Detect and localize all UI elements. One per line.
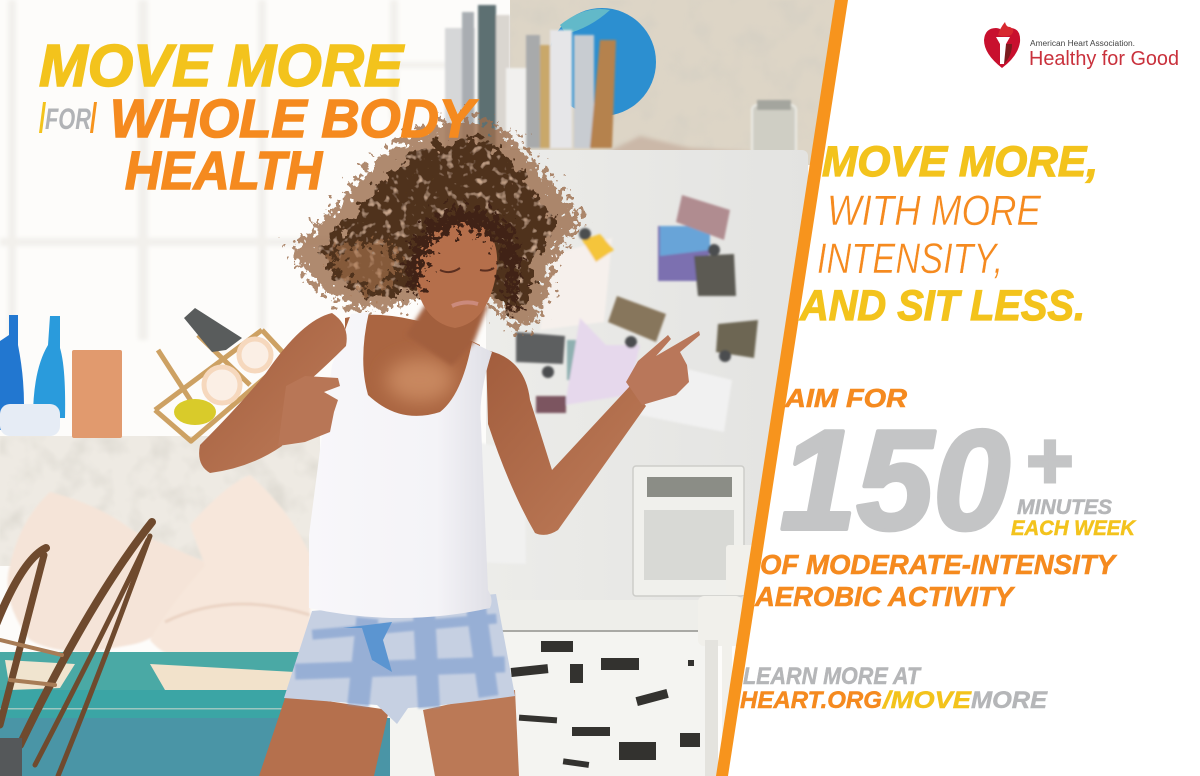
woman bbox=[199, 118, 700, 776]
wine rack bbox=[155, 330, 288, 442]
right hand bbox=[626, 331, 700, 405]
title: move more for whole body health bbox=[39, 33, 479, 201]
glass jar bbox=[752, 100, 796, 155]
logo: American Heart Association Healthy for Good: Healthy for Good bbox=[1029, 48, 1179, 70]
left arm bbox=[199, 313, 347, 473]
stat: aim for 150+ minutes each week: EACH WEEK bbox=[1011, 517, 1137, 540]
logo: American Heart Association Healthy for Good bbox=[984, 22, 1179, 70]
activity description bbox=[754, 549, 1117, 612]
orange diagonal stripe bbox=[716, 0, 848, 776]
windowsill wall bbox=[0, 436, 320, 566]
white right panel bbox=[728, 0, 1200, 776]
teal bench bbox=[0, 652, 390, 776]
outer wisps bbox=[292, 118, 582, 328]
call to action: learn more: HEART.ORG bbox=[740, 687, 882, 714]
message: move more, with more intensity, and sit less: AND SIT LESS. bbox=[799, 282, 1085, 330]
books bbox=[445, 5, 616, 148]
fridge upper door bbox=[486, 150, 808, 620]
call to action: learn more: LEARN MORE AT bbox=[743, 663, 922, 690]
fridge lower door bbox=[388, 620, 705, 776]
wooden chairs bbox=[0, 522, 152, 776]
white side table bbox=[698, 545, 756, 776]
shorts bbox=[284, 594, 515, 724]
cup on table bbox=[0, 738, 22, 776]
activity description: AEROBIC ACTIVITY bbox=[754, 581, 1015, 612]
dense curls bbox=[318, 138, 556, 312]
right leg bbox=[423, 690, 519, 776]
call to action: learn more: MORE bbox=[971, 687, 1048, 714]
title: move more for whole body health: WHOLE BODY bbox=[110, 89, 479, 149]
hair framing face bbox=[408, 209, 520, 318]
left hand bbox=[278, 376, 340, 446]
wine bottle bbox=[174, 399, 216, 425]
message: move more, with more intensity, and sit less: WITH MORE bbox=[827, 187, 1042, 235]
left leg bbox=[259, 695, 389, 776]
message: move more, with more intensity, and sit less: INTENSITY, bbox=[817, 235, 1003, 283]
plaster wall bbox=[510, 0, 840, 165]
dark object on rack bbox=[184, 308, 242, 352]
for label with slashes: FOR bbox=[45, 103, 91, 136]
call to action: learn more: /MOVE bbox=[882, 687, 972, 714]
globe bbox=[548, 8, 656, 116]
message: move more, with more intensity, and sit less bbox=[799, 138, 1098, 330]
window background bbox=[0, 0, 445, 342]
fridge photos and notes bbox=[482, 194, 760, 534]
pillows bbox=[8, 475, 310, 670]
face bbox=[414, 220, 497, 328]
shelf clutter bbox=[612, 136, 737, 150]
photo: woman dancing in kitchen bbox=[0, 0, 840, 776]
water dispenser bbox=[633, 466, 744, 596]
icon: heart and torch bbox=[984, 22, 1020, 68]
neck bbox=[406, 305, 488, 366]
message: move more, with more intensity, and sit less: MOVE MORE, bbox=[822, 138, 1098, 186]
call to action: learn more bbox=[740, 663, 1048, 714]
title: move more for whole body health: MOVE MORE bbox=[39, 33, 405, 99]
stat: aim for 150+ minutes each week: MINUTES bbox=[1017, 496, 1112, 519]
chest highlight bbox=[386, 358, 454, 402]
logo: American Heart Association Healthy for Good: American Heart Association. bbox=[1030, 39, 1135, 48]
blue bottles bbox=[0, 315, 65, 436]
stat: aim for 150+ minutes each week bbox=[780, 383, 1137, 560]
torso skin bbox=[345, 314, 480, 416]
facial features bbox=[440, 268, 494, 306]
title: move more for whole body health: HEALTH bbox=[125, 141, 323, 201]
activity description: OF MODERATE-INTENSITY bbox=[760, 549, 1117, 580]
lighter curls left of face bbox=[328, 244, 396, 292]
plus sign: + bbox=[1024, 423, 1076, 496]
right arm bbox=[486, 331, 700, 535]
hair bbox=[292, 118, 582, 328]
stat: aim for 150+ minutes each week: AIM FOR bbox=[784, 383, 907, 413]
tank top bbox=[309, 312, 492, 618]
big number: 150 bbox=[780, 401, 1010, 560]
terracotta cup bbox=[72, 350, 122, 438]
